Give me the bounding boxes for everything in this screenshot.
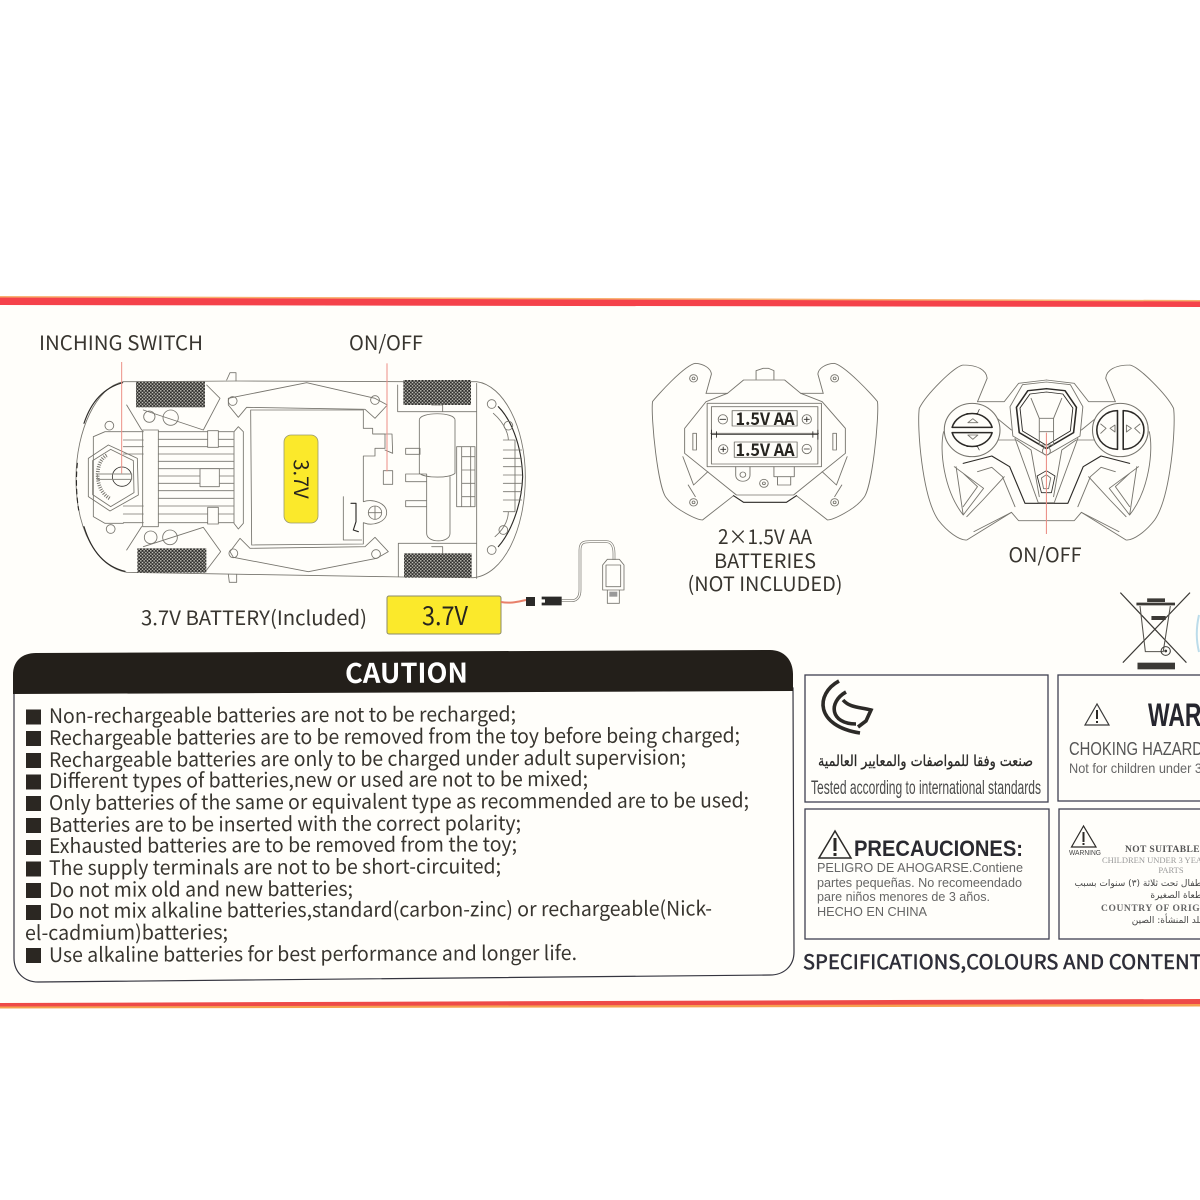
panel: caution box bbox=[13, 650, 794, 982]
icon: warning triangle bbox=[819, 831, 851, 858]
bottom red band bbox=[0, 999, 1200, 1008]
panel: choking hazard warning bbox=[1058, 675, 1200, 801]
caution text lines: Do not mix alkaline batteries,standard(carbon-zinc) or rechargeable(Nick- bbox=[49, 892, 712, 924]
side mirrors bbox=[227, 373, 237, 582]
caution text lines: Non-rechargeable batteries are not to be recharged; bbox=[49, 698, 516, 729]
wings and body half bbox=[919, 365, 1046, 540]
label plate text: 1.5V AA bbox=[736, 405, 795, 430]
icon: small warning triangle bbox=[1072, 826, 1096, 847]
body bbox=[685, 380, 845, 495]
yellow battery in car: 3.7V bbox=[288, 459, 317, 499]
lower emblem bbox=[1015, 438, 1078, 503]
icon: standards logo bbox=[823, 681, 871, 733]
label: battery included: 3.7V BATTERY(Included) bbox=[141, 602, 367, 631]
red leader: inching bbox=[120, 362, 123, 473]
gear cluster bbox=[127, 385, 221, 570]
panel: package background bbox=[0, 303, 1200, 1006]
nose shading bbox=[84, 383, 523, 571]
remote controller: battery side bbox=[652, 363, 878, 520]
caution text lines: Exhausted batteries are to be removed from the toy; bbox=[49, 828, 517, 859]
label: AA batteries bbox=[688, 521, 842, 597]
caution body bbox=[14, 688, 794, 982]
wheels bbox=[136, 380, 472, 578]
bottom chassis plate bbox=[230, 537, 388, 572]
caution header bbox=[13, 650, 793, 694]
caution text lines bbox=[25, 698, 749, 968]
label: remote on/off: ON/OFF bbox=[1008, 539, 1082, 568]
front grille bbox=[493, 413, 522, 537]
caution text lines: Use alkaline batteries for best performance and longer life. bbox=[49, 937, 577, 968]
switch bbox=[383, 471, 393, 484]
center dial bbox=[1010, 382, 1083, 455]
notice lines bbox=[1101, 845, 1200, 914]
arabic notice lines: بلد المنشأة: الصين bbox=[1132, 913, 1200, 926]
battery cover bbox=[251, 410, 387, 545]
caution text lines: Rechargeable batteries are only to be charged under adult supervision; bbox=[49, 742, 686, 773]
label: AA batteries: BATTERIES bbox=[714, 545, 816, 574]
label: AA batteries: 2×1.5V AA bbox=[718, 521, 813, 550]
english notice: Tested according to international standards bbox=[811, 778, 1041, 799]
label: inching switch: INCHING SWITCH bbox=[39, 327, 203, 356]
top red band bbox=[0, 296, 1200, 307]
precauciones title: PRECAUCIONES: bbox=[854, 836, 1023, 861]
inching gear hexagon bbox=[88, 445, 138, 511]
caution title: CAUTION bbox=[345, 652, 468, 691]
right buttons bbox=[1092, 403, 1148, 457]
spanish text: PELIGRO DE AHOGARSE.Contiene bbox=[817, 861, 1023, 875]
left buttons bbox=[944, 403, 1000, 457]
battery compartment bbox=[707, 403, 821, 467]
label: AA batteries: (NOT INCLUDED) bbox=[688, 568, 842, 597]
heat sink fins bbox=[123, 432, 233, 523]
notice lines: PARTS bbox=[1158, 865, 1184, 875]
side rail bbox=[234, 427, 243, 529]
right wing bbox=[796, 363, 878, 520]
screws bbox=[105, 396, 513, 558]
bullet squares bbox=[26, 710, 41, 963]
caution text lines: el-cadmium)batteries; bbox=[25, 916, 228, 946]
label plate text bbox=[736, 405, 795, 461]
fasteners bbox=[690, 375, 839, 506]
caution text lines: Batteries are to be inserted with the correct polarity; bbox=[49, 807, 521, 838]
spanish text: pare niños menores de 3 años. bbox=[817, 890, 990, 904]
motor housing bbox=[93, 430, 158, 527]
panel: precauciones bbox=[805, 809, 1049, 939]
warning caption: WARNING bbox=[1069, 850, 1101, 857]
caution text lines: Different types of batteries,new or used are not to be mixed; bbox=[49, 763, 588, 794]
arabic notice lines bbox=[1074, 877, 1200, 926]
top chassis plate bbox=[228, 383, 387, 418]
red leader bbox=[1045, 433, 1048, 534]
car chassis diagram bbox=[76, 362, 525, 582]
icon: crossed-out wheelie bin bbox=[1120, 593, 1190, 669]
label plate text: 1.5V AA bbox=[736, 436, 795, 461]
arabic notice: صنعت وفقا للمواصفات والمعايير العالمية bbox=[818, 752, 1033, 770]
red leader: on/off bbox=[385, 363, 388, 471]
spanish text: HECHO EN CHINA bbox=[817, 905, 928, 919]
caution text lines: Rechargeable batteries are to be removed from the toy before being charged; bbox=[49, 719, 740, 751]
icon: warning triangle bbox=[1085, 704, 1109, 725]
panel: not suitable warning bbox=[1059, 809, 1200, 939]
blue edge mark bbox=[1197, 615, 1199, 652]
terminal marks bbox=[718, 415, 811, 454]
battery pack: 3.7V bbox=[422, 596, 468, 633]
panel: standards notice bbox=[805, 675, 1048, 802]
front motor assembly bbox=[398, 383, 477, 578]
spanish text: partes pequeñas. No recomeendado bbox=[817, 876, 1022, 890]
caution text lines: Only batteries of the same or equivalent type as recommended are to be used; bbox=[49, 784, 749, 816]
label: car on/off: ON/OFF bbox=[349, 327, 423, 356]
caution text lines: Do not mix old and new batteries; bbox=[49, 873, 353, 903]
battery pack bbox=[387, 596, 535, 634]
label plates bbox=[732, 411, 797, 457]
left wing bbox=[652, 363, 734, 520]
remote controller: front side bbox=[919, 365, 1174, 540]
USB charging cable bbox=[542, 542, 624, 605]
yellow battery in car bbox=[284, 435, 318, 523]
spanish text bbox=[817, 861, 1023, 919]
caution text lines: The supply terminals are not to be short-circuited; bbox=[49, 850, 501, 881]
car body outline bbox=[76, 381, 525, 578]
